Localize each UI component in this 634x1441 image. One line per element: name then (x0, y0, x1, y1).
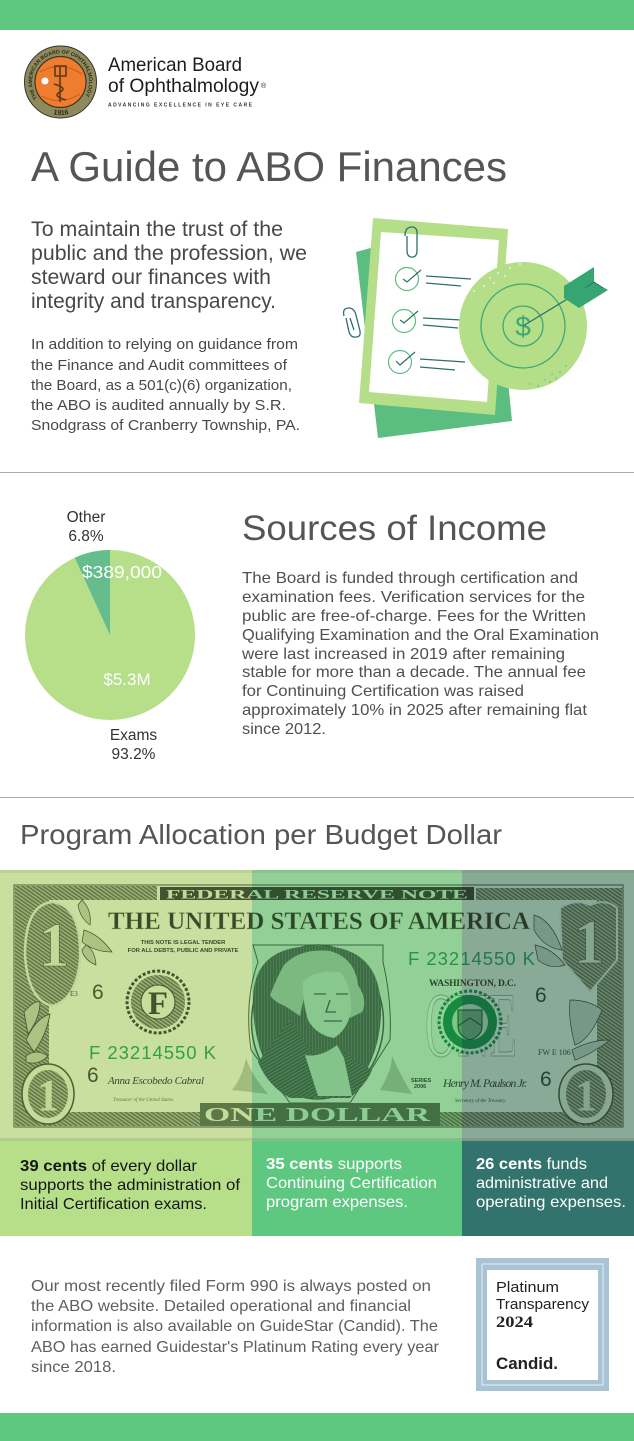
allocation: continuing certification: Continuing Certification (266, 1175, 437, 1192)
plate marks left (70, 981, 104, 1087)
title: A Guide to ABO Finances (31, 143, 507, 190)
one dollar text: ONE DOLLAR (204, 1104, 431, 1126)
bottom left numeral 1: 1 (37, 1071, 59, 1120)
engraved border (14, 885, 623, 1127)
heading: program allocation: Program Allocation per Budget Dollar (20, 819, 502, 850)
cravat (305, 1045, 352, 1096)
treasurer signature: Treasurer of the United States. (113, 1098, 174, 1103)
pie chart: sources of income (25, 509, 195, 763)
treasurer signature: Anna Escobedo Cabral (107, 1075, 204, 1087)
form 990 paragraph: Our most recently filed Form 990 is always posted on (31, 1278, 431, 1295)
intro statement: To maintain the trust of the (31, 218, 283, 241)
intro statement: steward our finances with (31, 266, 271, 289)
sources of income text: since 2012. (242, 721, 326, 738)
dollar bill image: ONE (425, 974, 517, 1076)
divider (0, 797, 634, 798)
paper clip top (405, 227, 417, 257)
checklist item 2 (392, 310, 462, 332)
bottom left numeral 1 (22, 1064, 74, 1124)
form 990 paragraph: the ABO website. Detailed operational and financial (31, 1298, 411, 1315)
sources of income text: were last increased in 2019 after remaining (241, 646, 565, 663)
form 990 paragraph: information is also available on GuideStar (Candid). The (31, 1318, 438, 1335)
audit paragraph: Snodgrass of Cranberry Township, PA. (31, 417, 300, 434)
tint: administrative (462, 870, 634, 1141)
checklist item 3 (388, 350, 465, 374)
sources of income text: stable for more than a decade. The annual fee (242, 664, 586, 681)
left numeral 1: 1 (38, 912, 70, 980)
legal tender note: FOR ALL DEBTS, PUBLIC AND PRIVATE (128, 948, 238, 954)
legal tender note: THIS NOTE IS LEGAL TENDER (141, 940, 226, 946)
legal tender note (128, 940, 238, 954)
sources of income text (241, 570, 599, 738)
badge: Candid platinum transparency 2024: Transparency (496, 1297, 590, 1313)
bottom right numeral 1: 1 (575, 1071, 597, 1120)
laurel around portrait (232, 1056, 412, 1094)
pie value: other: $389,000 (82, 562, 162, 582)
plate marks right: 6 (535, 984, 547, 1007)
plate marks right (535, 984, 571, 1091)
checklist item 1 (396, 268, 471, 290)
serial number left: F 23214550 K (89, 1042, 217, 1063)
logo wordmark: American Board (108, 54, 242, 76)
top bar (0, 0, 634, 30)
plate marks right: 6 (540, 1068, 552, 1091)
sources of income text: for Continuing Certification was raised (242, 683, 524, 700)
bottom right numeral 1 (559, 1064, 613, 1124)
treasurer signature (107, 1075, 204, 1103)
back sheet (356, 240, 512, 438)
divider (0, 472, 634, 473)
audit paragraph: the Board, as a 501(c)(6) organization, (31, 377, 292, 394)
left numeral 1 (24, 900, 112, 1063)
dollar bill image (0, 870, 634, 1141)
logo seal (24, 46, 97, 118)
series and secretary signature (411, 1076, 527, 1104)
federal reserve seal (127, 971, 189, 1033)
illustration: checklist and target (344, 218, 608, 438)
logo wordmark (108, 54, 267, 108)
allocation: administrative (462, 1141, 634, 1236)
intro statement: integrity and transparency. (31, 290, 276, 313)
audit paragraph (31, 336, 300, 434)
plate marks left: 6 (92, 981, 104, 1004)
right numeral 1: 1 (574, 909, 604, 977)
portrait of Washington (249, 945, 390, 1103)
plate marks right: FW E 106 (538, 1048, 571, 1057)
audit paragraph: the ABO is audited annually by S.R. (31, 397, 286, 414)
coat (258, 1020, 372, 1098)
federal reserve note banner (160, 886, 474, 902)
audit paragraph: the Finance and Audit committees of (31, 357, 288, 374)
logo wordmark: ADVANCING EXCELLENCE IN EYE CARE (108, 102, 253, 108)
allocation: continuing certification: program expenses. (266, 1194, 408, 1211)
badge: Candid platinum transparency 2024: 2024 (496, 1314, 533, 1331)
allocation: administrative: operating expenses. (476, 1194, 626, 1211)
form 990 paragraph (31, 1278, 440, 1376)
form 990 paragraph: since 2018. (31, 1359, 116, 1376)
series and secretary signature: Secretary of the Treasury. (455, 1099, 506, 1104)
allocation: initial certification (0, 1141, 252, 1236)
allocation: continuing certification: 35 cents supports (266, 1156, 402, 1173)
allocation: administrative: administrative and (476, 1175, 608, 1192)
target: $ (515, 311, 531, 342)
audit paragraph: In addition to relying on guidance from (31, 336, 298, 353)
paper clip left (344, 308, 360, 337)
allocation: initial certification: 39 cents of every dollar (20, 1158, 198, 1175)
pie label: exams: Exams (110, 727, 157, 744)
hair (270, 951, 364, 1018)
badge: Candid platinum transparency 2024 (476, 1258, 609, 1391)
logo: American Board of Ophthalmology (24, 46, 267, 118)
series and secretary signature: SERIES (411, 1078, 432, 1084)
federal reserve note banner: FEDERAL RESERVE NOTE (166, 886, 468, 902)
arrow (523, 267, 608, 326)
allocation: administrative: 26 cents funds (476, 1156, 587, 1173)
logo wordmark: ® (261, 82, 267, 90)
series and secretary signature: 2006 (414, 1084, 426, 1090)
allocation: initial certification: Initial Certification exams. (20, 1196, 207, 1213)
right numeral 1 (534, 902, 617, 1060)
sources of income text: The Board is funded through certification and (242, 570, 578, 587)
washington dc: WASHINGTON, D.C. (429, 979, 516, 989)
logo seal: THE AMERICAN BOARD OF OPHTHALMOLOGY (28, 50, 93, 100)
tint: initial certification (0, 870, 252, 1141)
tint: continuing certification (252, 870, 462, 1141)
bottom bar (0, 1413, 634, 1441)
pie value: exams: $5.3M (103, 670, 151, 689)
sources of income text: Qualifying Examination and the Oral Examination (242, 627, 599, 644)
pie label: other: Other (67, 509, 105, 526)
bill headline: THE UNITED STATES OF AMERICA (108, 908, 530, 935)
bill paper (0, 870, 634, 1141)
federal reserve seal: F (148, 986, 168, 1022)
pie label: other: 6.8% (68, 528, 104, 545)
badge: Candid platinum transparency 2024: Platinum (496, 1280, 559, 1296)
logo seal: 1916 (54, 110, 68, 115)
logo wordmark: of Ophthalmology (108, 75, 259, 97)
badge: Candid platinum transparency 2024: Candid. (496, 1355, 558, 1373)
allocation: initial certification: supports the administration of (20, 1177, 241, 1194)
pie label: exams (110, 727, 157, 763)
target (459, 262, 608, 390)
sources of income text: approximately 10% in 2025 after remaining flat (242, 702, 588, 719)
plate marks left: 6 (87, 1064, 99, 1087)
serial number right: F 23214550 K (408, 948, 536, 969)
pie label: exams: 93.2% (112, 746, 156, 763)
plate marks left: E3 (70, 990, 78, 998)
intro statement (31, 218, 307, 313)
intro statement: public and the profession, we (31, 242, 307, 265)
heading: sources of income: Sources of Income (242, 509, 547, 548)
treasury seal (439, 991, 501, 1053)
checklist paper (359, 218, 508, 415)
sources of income text: examination fees. Verification services for the (242, 589, 585, 606)
face (303, 972, 351, 1038)
form 990 paragraph: ABO has earned Guidestar's Platinum Rating every year (31, 1339, 440, 1356)
pie label: other (67, 509, 105, 545)
series and secretary signature: Henry M. Paulson Jr. (442, 1076, 527, 1090)
sources of income text: public are free-of-charge. Fees for the Written (242, 608, 586, 625)
allocation: continuing certification (252, 1141, 462, 1236)
